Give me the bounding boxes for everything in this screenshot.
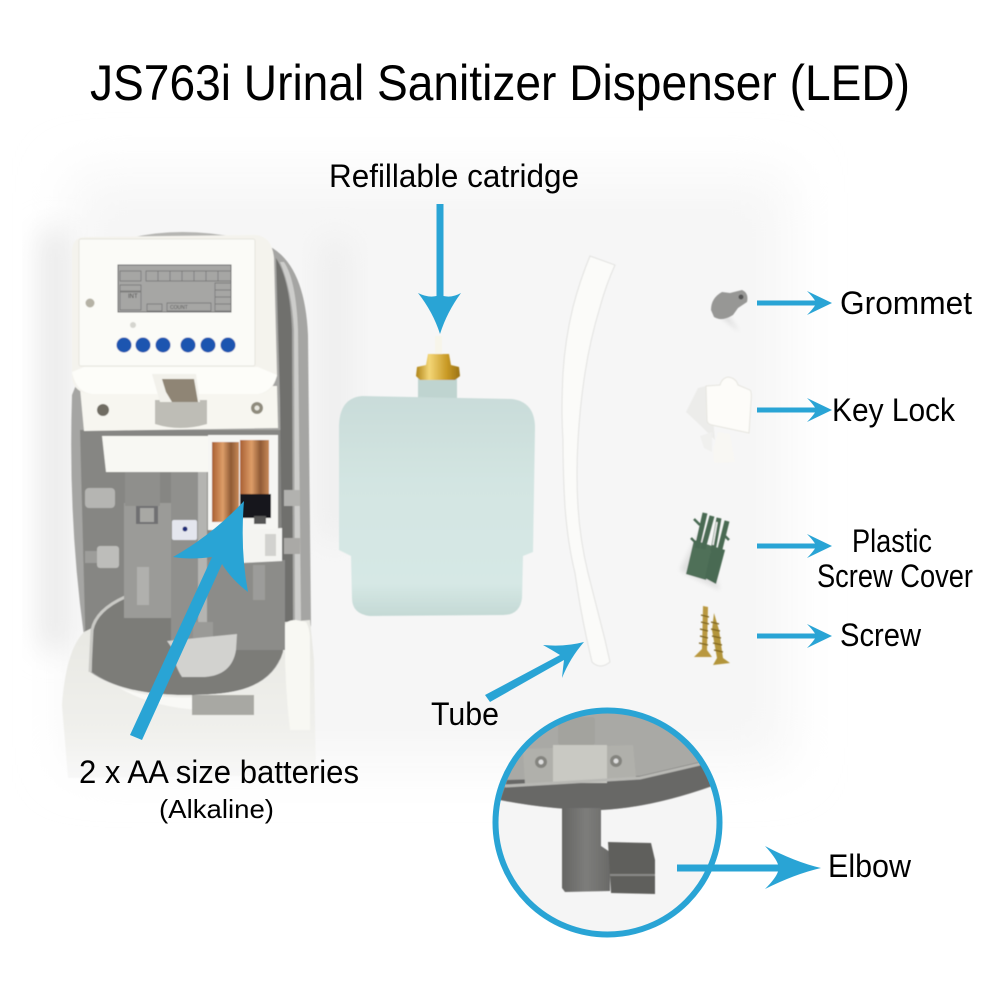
interior: left pegs (85, 488, 115, 508)
tube label: Tube (431, 696, 499, 732)
housing: grey shell (71, 240, 311, 690)
grommet arrow (757, 291, 832, 315)
lcd screen: COUNT (170, 305, 188, 311)
grommet label: Grommet (840, 285, 972, 321)
interior: shaft (198, 472, 207, 627)
tube (562, 256, 615, 666)
lcd screen: INT (128, 294, 138, 300)
refillable cartridge arrow (418, 204, 461, 334)
elbow: housing (502, 714, 710, 808)
bottle body (339, 396, 535, 616)
white flap (102, 436, 208, 472)
plastic screw cover label: Screw Cover (817, 558, 973, 594)
interior: ring clamp (167, 634, 237, 677)
housing: interior (80, 430, 292, 660)
control box (72, 235, 277, 394)
interior: mounting plate (124, 503, 171, 618)
batteries arrow (130, 501, 248, 740)
interior: sticker (172, 520, 197, 540)
cartridge photo (339, 336, 535, 616)
key lock label: Key Lock (832, 392, 956, 428)
batteries label: 2 x AA size batteries (79, 754, 359, 790)
neck (418, 378, 457, 398)
elbow label: Elbow (828, 848, 912, 884)
screw arrow (757, 624, 832, 648)
tube arrow (485, 642, 584, 702)
screws (694, 606, 730, 665)
title: JS763i Urinal Sanitizer Dispenser (LED) (90, 55, 910, 111)
elbow arrow (677, 846, 821, 889)
base: white lower body (62, 620, 316, 778)
control box notch (152, 374, 207, 428)
interior: right pegs (284, 490, 300, 506)
gold cap (416, 354, 460, 380)
elbow: fitting (608, 842, 655, 894)
grommet (711, 290, 747, 332)
elbow: bracket (524, 775, 636, 784)
elbow: vertical pipe (562, 808, 610, 892)
housing: top arc (130, 232, 240, 238)
screw label: Screw (840, 617, 922, 653)
batteries label: (Alkaline) (159, 794, 274, 824)
plastic screw cover (680, 513, 729, 590)
control buttons (116, 338, 236, 352)
battery holder (208, 435, 278, 530)
plastic screw cover label: Plastic (852, 523, 932, 559)
key lock arrow (757, 398, 832, 422)
cartridge label: Refillable catridge (329, 158, 579, 194)
dispenser photo (62, 232, 316, 778)
lcd screen (118, 265, 231, 312)
base: bowl rim (90, 597, 125, 672)
plastic screw cover label (817, 523, 973, 594)
batteries label (79, 754, 359, 824)
control face (79, 239, 255, 366)
nozzle (435, 336, 442, 358)
lower band of control box (80, 386, 278, 431)
plastic screw cover arrow (757, 534, 832, 558)
batteries (212, 442, 239, 522)
elbow detail circle (490, 700, 730, 934)
screws and led (86, 298, 263, 416)
switch box (242, 528, 282, 563)
base: white pillar (285, 620, 310, 730)
key lock (686, 377, 751, 463)
base: bowl interior (92, 597, 283, 695)
